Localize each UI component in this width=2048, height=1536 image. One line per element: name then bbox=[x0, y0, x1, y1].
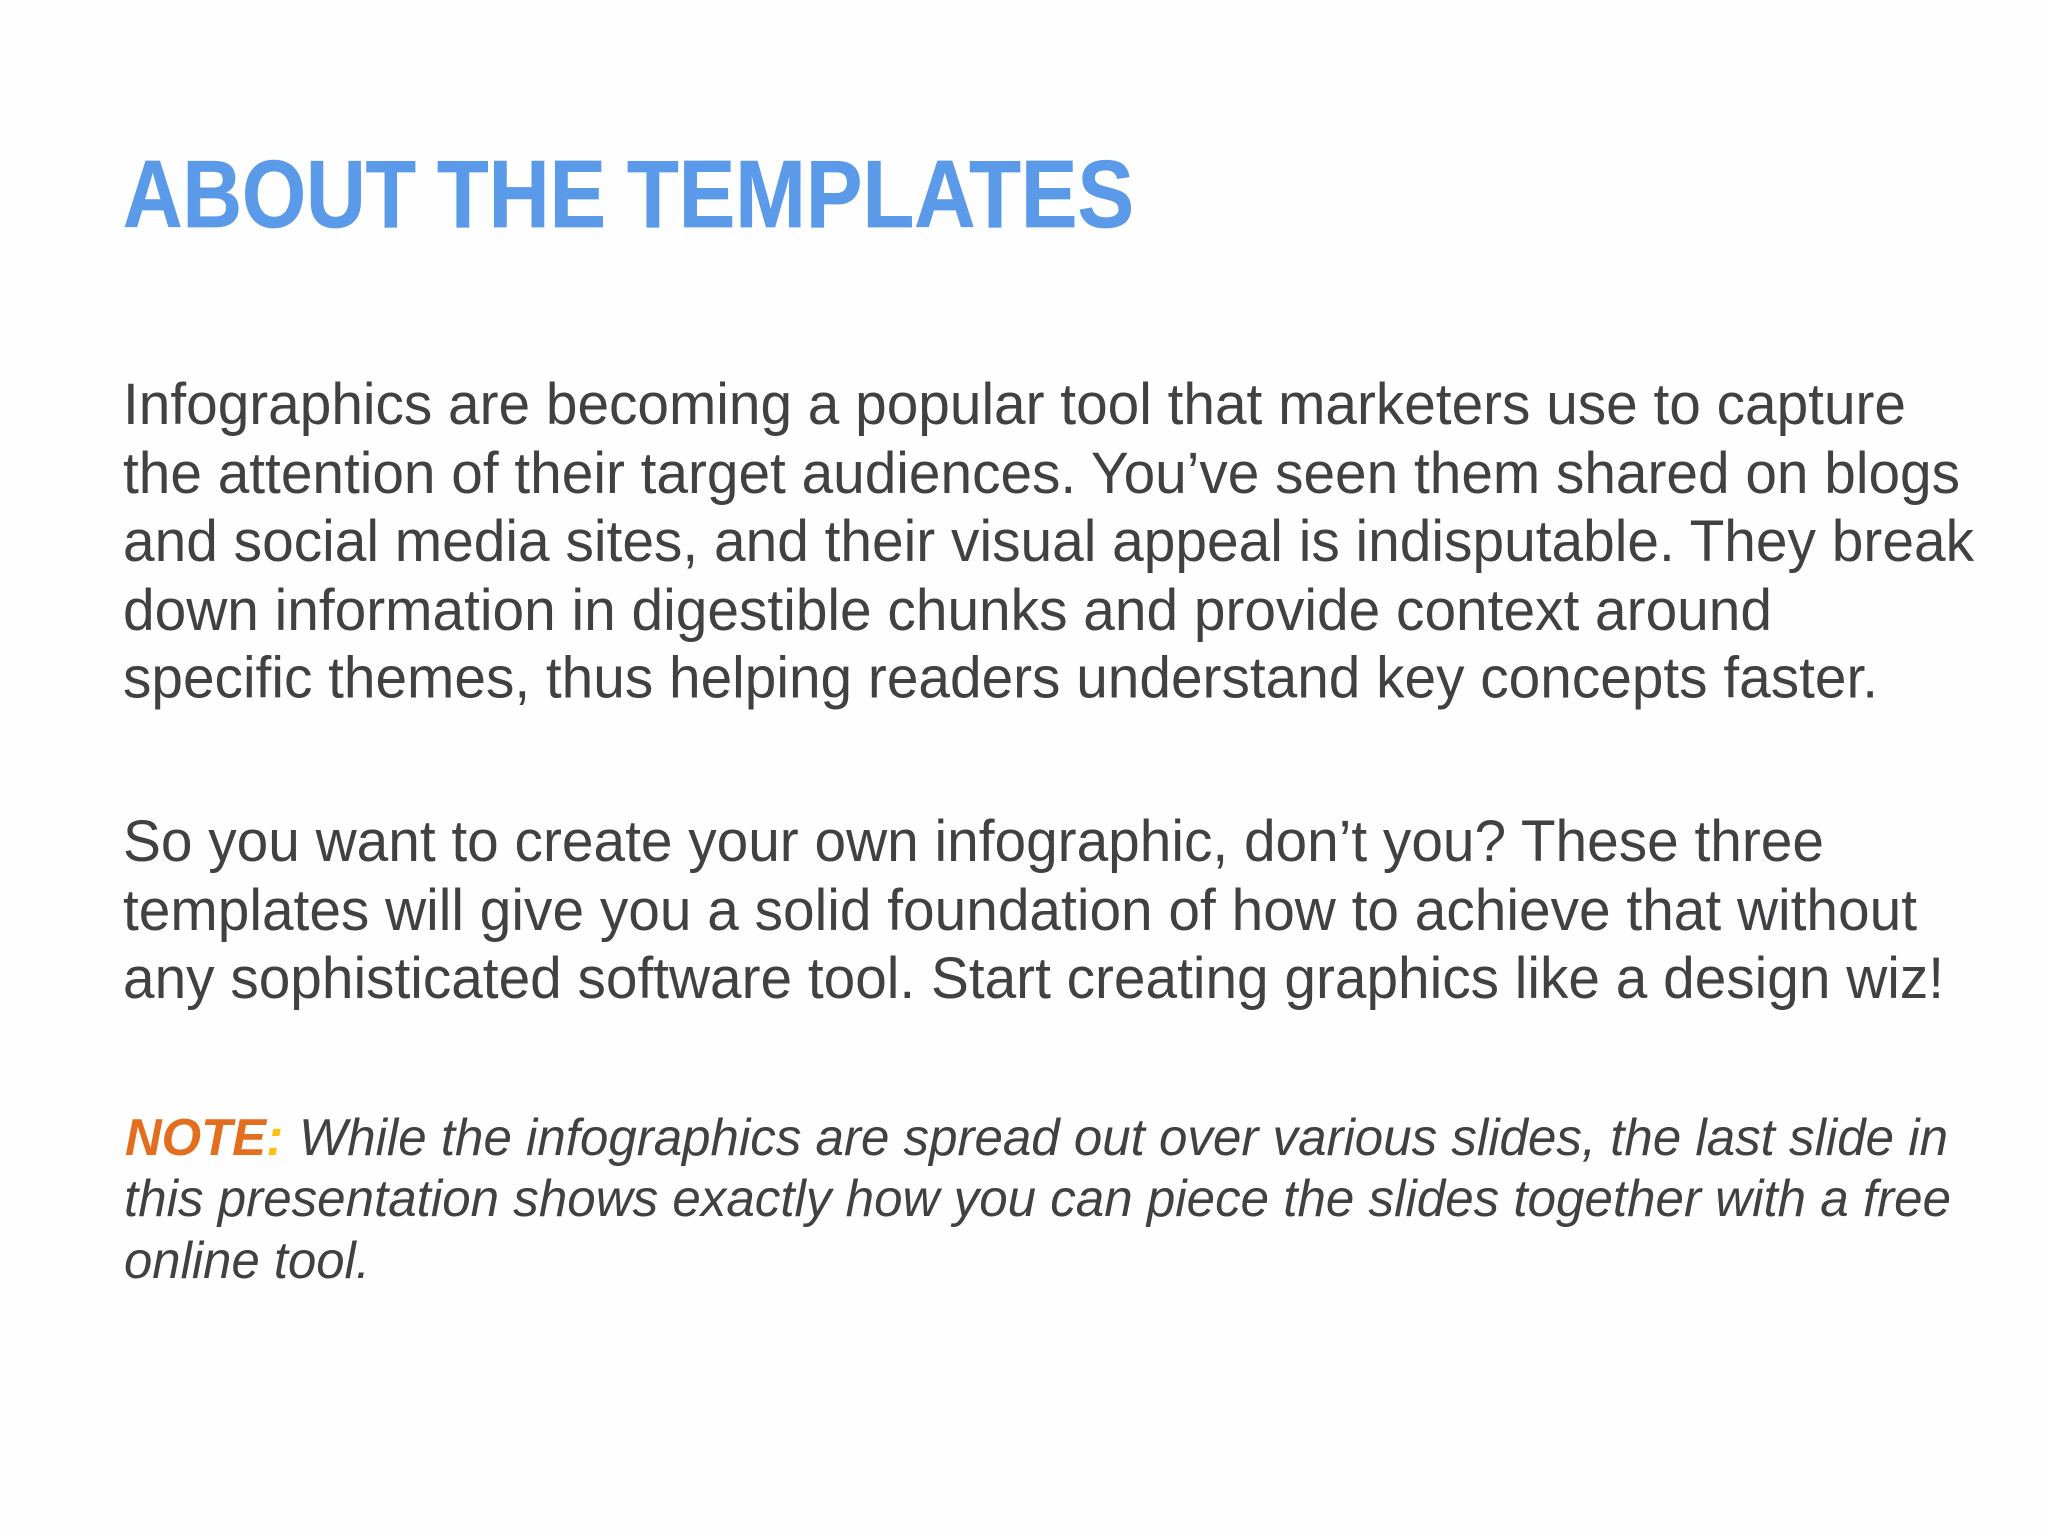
callout: note: this presentation shows exactly how you can piece the slides together with a free bbox=[124, 1170, 1951, 1228]
text block: intro paragraph: specific themes, thus helping readers understand key concepts faster. bbox=[123, 646, 1878, 710]
text block: second paragraph: So you want to create your own infographic, don’t you? These three bbox=[123, 809, 1824, 874]
title bbox=[123, 141, 1134, 248]
text block: intro paragraph: down information in digestible chunks and provide context around bbox=[123, 578, 1772, 643]
text block: second paragraph: any sophisticated software tool. Start creating graphics like a design wiz! bbox=[123, 946, 1944, 1011]
callout: note: NOTE bbox=[125, 1109, 267, 1167]
text block: intro paragraph: the attention of their target audiences. You’ve seen them shared on blogs bbox=[123, 441, 1960, 506]
callout: note bbox=[124, 1109, 1951, 1290]
text block: second paragraph: templates will give you a solid foundation of how to achieve that without bbox=[123, 878, 1917, 943]
callout: note: : bbox=[266, 1109, 283, 1167]
text block: intro paragraph: and social media sites, and their visual appeal is indisputable. They break bbox=[123, 509, 1975, 574]
callout: note: online tool. bbox=[124, 1232, 370, 1290]
text block: intro paragraph: Infographics are becoming a popular tool that marketers use to capture bbox=[123, 372, 1906, 437]
text block: intro paragraph bbox=[123, 372, 1975, 710]
text block: second paragraph bbox=[123, 809, 1944, 1011]
title: THE bbox=[437, 141, 606, 248]
callout: note: While the infographics are spread out over various slides, the last slide in bbox=[299, 1109, 1948, 1167]
title: ABOUT bbox=[123, 141, 416, 248]
title: TEMPLATES bbox=[627, 141, 1134, 248]
